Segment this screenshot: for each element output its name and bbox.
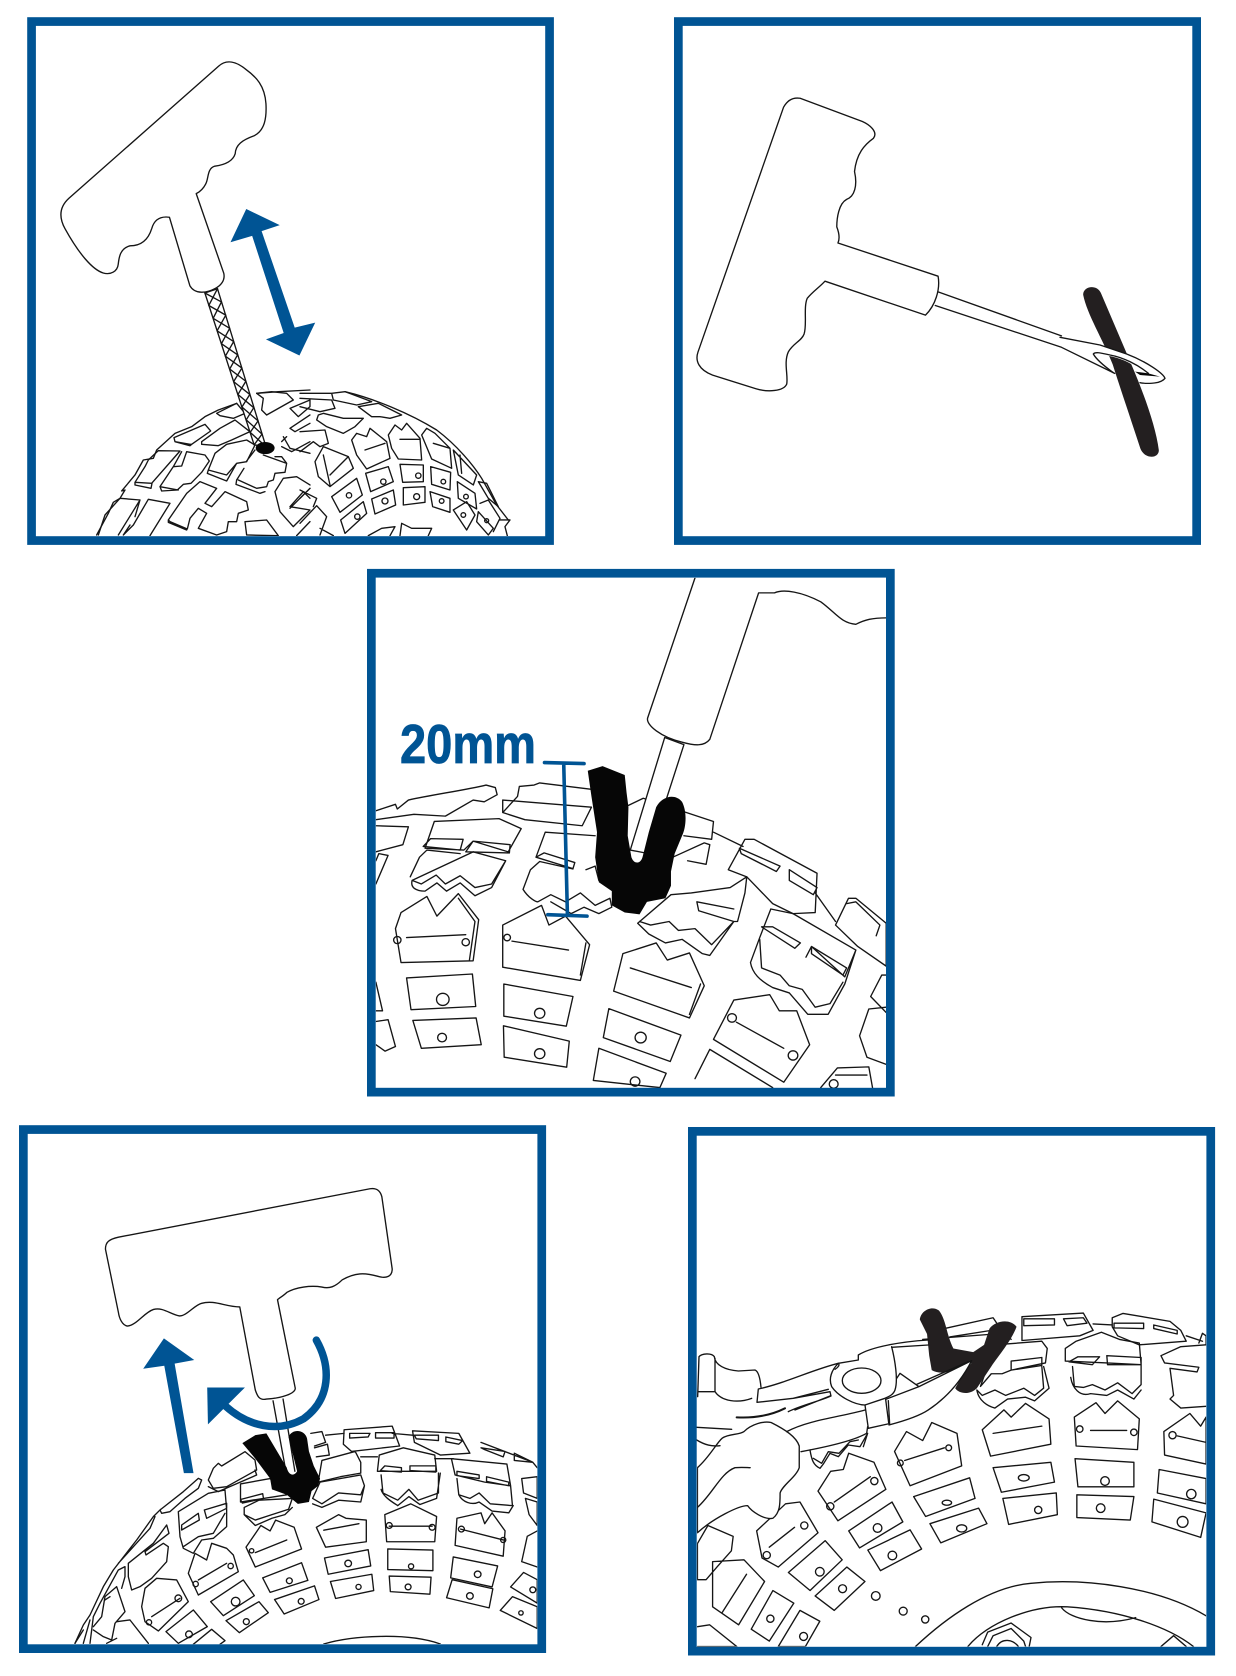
tyre tread, centre and right bbox=[240, 1426, 537, 1644]
icon: rubber plug bbox=[242, 1431, 320, 1504]
panel border bbox=[678, 22, 1197, 541]
panel: step 3, 20mm plug insertion bbox=[371, 573, 890, 1092]
icon: pliers bbox=[697, 1340, 972, 1468]
measure bracket bbox=[544, 763, 587, 916]
tyre with tread pattern bbox=[376, 783, 886, 1088]
icon: rasp shaft bbox=[205, 289, 266, 447]
heading: 20mm label: 20mm bbox=[400, 713, 536, 775]
panel: step 5, pliers trim plug bbox=[692, 1131, 1211, 1651]
arrow: rotate bbox=[207, 1340, 326, 1427]
tyre with tread pattern bbox=[97, 390, 510, 536]
tyre with tread pattern bbox=[697, 1313, 1206, 1647]
panel border bbox=[23, 1130, 542, 1649]
icon: T-handle bbox=[697, 98, 939, 391]
panel border bbox=[32, 22, 550, 541]
arrow: pull up bbox=[143, 1338, 194, 1473]
panel border bbox=[692, 1131, 1211, 1651]
icon: T-handle bbox=[105, 1189, 392, 1399]
icon: rubber plug bbox=[920, 1308, 1017, 1393]
hand detail lines bbox=[697, 1467, 750, 1507]
icon: hand bbox=[697, 1422, 799, 1533]
icon: needle eye bbox=[1060, 337, 1165, 383]
icon: needle shaft bbox=[935, 292, 1115, 373]
tyre tread, left side bbox=[75, 1452, 268, 1644]
icon: needle bbox=[630, 738, 684, 854]
icon: T-handle bbox=[61, 62, 266, 292]
wheel rim and hub bbox=[915, 1582, 1206, 1647]
icon: rubber plug bbox=[1083, 287, 1159, 457]
panel: step 1, rasp tool in tyre bbox=[32, 22, 550, 541]
icon: T-handle shaft bbox=[647, 578, 886, 745]
panel border bbox=[371, 573, 890, 1092]
arrow: up and down bbox=[230, 209, 315, 356]
icon: rubber plug bbox=[588, 766, 686, 914]
panel: step 2, needle with plug bbox=[678, 22, 1197, 541]
icon: needle bbox=[273, 1399, 295, 1471]
panel: step 4, twist and pull out tool bbox=[23, 1130, 542, 1649]
icon: puncture hole bbox=[256, 442, 275, 454]
